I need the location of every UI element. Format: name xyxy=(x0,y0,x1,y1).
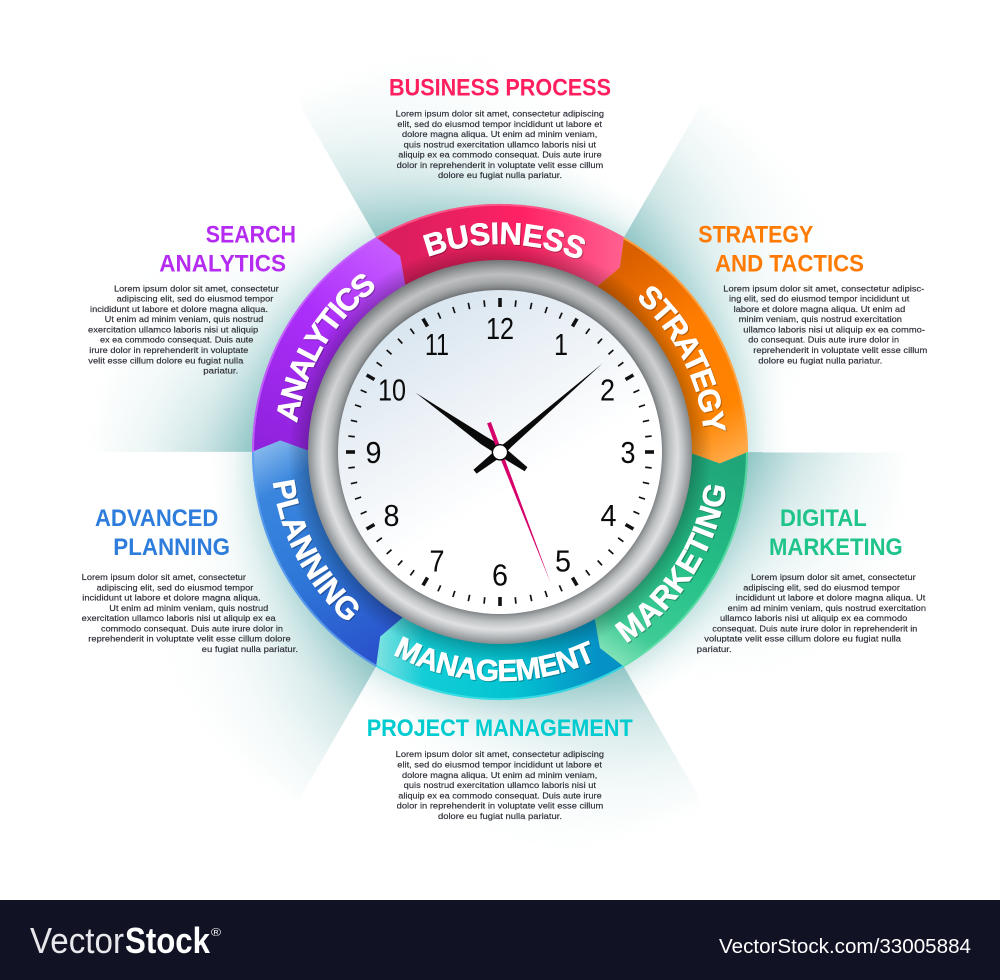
body text: elit, sed do eiusmod tempor incididunt ut labore et xyxy=(397,760,603,770)
second hand xyxy=(487,422,551,583)
segment: strategy xyxy=(594,237,748,464)
body text: adipiscing elit, sed do eiusmod tempor xyxy=(117,294,273,304)
background wedge glow xyxy=(115,102,885,802)
body text: Lorem ipsum dolor sit amet, consectetur xyxy=(82,572,246,582)
clock numerals: 6 xyxy=(492,558,508,593)
segment: marketing xyxy=(594,452,748,667)
body text: minim veniam, quis nostrud exercitation xyxy=(739,314,902,324)
heading: STRATEGY xyxy=(698,222,813,249)
body text xyxy=(723,283,927,365)
segment: business xyxy=(376,204,624,289)
ring rim highlights xyxy=(253,205,747,699)
colored ring xyxy=(252,204,748,700)
footer url: VectorStock.com/33005884 xyxy=(719,936,971,958)
ring labels xyxy=(272,222,727,682)
body text: incididunt ut labore et dolore magna aliqua. xyxy=(82,593,261,603)
body text: dolore magna aliqua. Ut enim ad minim veniam, xyxy=(402,770,597,780)
segment: planning xyxy=(252,440,406,667)
body text: voluptate velit esse cillum dolore eu fugiat nulla xyxy=(704,634,901,644)
body text: quis nostrud exercitation ullamco laboris nisi ut xyxy=(404,780,597,790)
heading: SEARCH xyxy=(206,222,296,249)
body text xyxy=(82,572,298,654)
clock numerals: 11 xyxy=(425,327,449,362)
body text: Ut enim ad minim veniam, quis nostrud xyxy=(105,314,264,324)
body text: pariatur. xyxy=(203,366,238,376)
block: project management xyxy=(367,715,633,821)
block: search analytics xyxy=(88,222,296,376)
body text: dolor in reprehenderit in voluptate velit esse cillum xyxy=(397,160,603,170)
body text: velit esse cillum dolore eu fugiat nulla xyxy=(88,355,244,365)
body text: commodo consequat. Duis aute irure dolor in xyxy=(101,623,283,633)
clock numerals: 1 xyxy=(554,327,568,362)
heading: MARKETING xyxy=(769,534,903,561)
label: management: MANAGEMENT xyxy=(394,636,592,682)
body text: adipiscing elit, sed do eiusmod tempor xyxy=(743,582,900,592)
heading xyxy=(159,222,296,278)
heading: PROJECT MANAGEMENT xyxy=(367,715,633,742)
block: strategy and tactics xyxy=(698,222,927,365)
ring inner shadow xyxy=(288,240,712,664)
body text: quis nostrud exercitation ullamco laboris nisi ut xyxy=(404,139,597,149)
heading xyxy=(769,505,903,561)
body text: Lorem ipsum dolor sit amet, consectetur xyxy=(114,283,279,293)
body text: incididunt ut labore et dolore magna aliqua. Ut xyxy=(736,593,926,603)
body text: ing elit, sed do eiusmod tempor incididunt ut xyxy=(729,294,910,304)
heading: ANALYTICS xyxy=(159,251,286,278)
clock numerals: 12 xyxy=(486,311,514,346)
clock numerals: 9 xyxy=(366,435,382,470)
hour ticks xyxy=(346,298,654,606)
silver bezel xyxy=(308,260,692,644)
body text: enim ad minim veniam, quis nostrud exercitation xyxy=(728,603,926,613)
footer bar xyxy=(0,900,1000,980)
body text: dolore eu fugiat nulla pariatur. xyxy=(758,355,882,365)
heading: DIGITAL xyxy=(780,505,867,532)
body text: aliquip ex ea commodo consequat. Duis aute irure xyxy=(398,150,602,160)
body text: Ut enim ad minim veniam, quis nostrud xyxy=(109,603,269,613)
clock numerals: 7 xyxy=(430,544,444,579)
block: advanced planning xyxy=(82,505,298,654)
heading: PLANNING xyxy=(113,534,230,561)
body text: consequat. Duis aute irure dolor in reprehenderit in xyxy=(712,623,918,633)
body text: eu fugiat nulla pariatur. xyxy=(202,644,298,654)
heading: BUSINESS PROCESS xyxy=(389,75,611,102)
body text: dolor in reprehenderit in voluptate velit esse cillum xyxy=(397,801,603,811)
body text xyxy=(88,283,279,376)
body text: pariatur. xyxy=(697,644,732,654)
body text: irure dolor in reprehenderit in voluptate xyxy=(89,345,249,355)
body text xyxy=(697,572,926,654)
body text: ullamco laboris nisi ut aliquip ex ea commodo xyxy=(720,613,908,623)
body text: exercitation ullamco laboris nisi ut aliquip ex ea xyxy=(82,613,276,623)
segment: management xyxy=(376,615,624,700)
body text: reprehenderit in voluptate velit esse cillum dolore xyxy=(88,634,291,644)
center hub xyxy=(492,445,508,460)
label: business: BUSINESS xyxy=(422,222,586,260)
block: digital marketing xyxy=(697,505,926,654)
body text: Lorem ipsum dolor sit amet, consectetur adipiscing xyxy=(396,108,604,118)
body text: Lorem ipsum dolor sit amet, consectetur adipiscing xyxy=(396,749,604,759)
label: planning: PLANNING xyxy=(272,480,360,622)
clock numerals: 10 xyxy=(378,373,406,408)
clock face xyxy=(338,290,662,614)
body text xyxy=(396,749,604,821)
label: marketing: MARKETING xyxy=(614,484,726,644)
body text: adipiscing elit, sed do eiusmod tempor xyxy=(97,582,253,592)
body text: dolore magna aliqua. Ut enim ad minim veniam, xyxy=(402,129,597,139)
body text: Lorem ipsum dolor sit amet, consectetur xyxy=(751,572,916,582)
heading xyxy=(698,222,864,278)
body text: dolore eu fugiat nulla pariatur. xyxy=(438,811,562,821)
clock xyxy=(308,260,692,644)
block: business process xyxy=(389,75,611,180)
body text xyxy=(396,108,604,180)
hour hand xyxy=(416,393,527,471)
label: strategy: STRATEGY xyxy=(639,286,727,432)
clock numerals xyxy=(366,311,636,593)
heading: AND TACTICS xyxy=(715,251,864,278)
label: analytics: ANALYTICS xyxy=(277,274,376,424)
body text: Lorem ipsum dolor sit amet, consectetur adipisc- xyxy=(723,283,924,293)
bezel shading xyxy=(323,275,677,629)
heading: ADVANCED xyxy=(95,505,218,532)
body text: reprehenderit in voluptate velit esse cillum xyxy=(753,345,927,355)
body text: incididunt ut labore et dolore magna aliqua. xyxy=(90,304,268,314)
minute ticks xyxy=(348,300,652,604)
footer logo: Vector xyxy=(30,920,124,961)
footer logo: ® xyxy=(211,927,221,939)
body text: elit, sed do eiusmod tempor incididunt ut labore et xyxy=(397,119,603,129)
footer logo xyxy=(30,920,221,961)
body text: labore et dolore magna aliqua. Ut enim ad xyxy=(734,304,906,314)
body text: ex ea commodo consequat. Duis aute xyxy=(100,335,254,345)
clock numerals: 4 xyxy=(600,498,616,533)
segment: analytics xyxy=(252,237,406,452)
footer logo: Stock xyxy=(125,920,211,961)
body text: aliquip ex ea commodo consequat. Duis aute irure xyxy=(398,790,602,800)
minute hand xyxy=(473,363,603,474)
clock numerals: 3 xyxy=(620,435,636,470)
body text: dolore eu fugiat nulla pariatur. xyxy=(438,170,562,180)
body text: ullamco laboris nisi ut aliquip ex ea commo- xyxy=(743,324,925,334)
clock numerals: 2 xyxy=(600,373,615,408)
body text: exercitation ullamco laboris nisi ut aliquip xyxy=(88,324,259,334)
clock numerals: 8 xyxy=(384,498,400,533)
heading xyxy=(95,505,230,561)
clock numerals: 5 xyxy=(555,544,571,579)
body text: do consequat. Duis aute irure dolor in xyxy=(748,335,899,345)
